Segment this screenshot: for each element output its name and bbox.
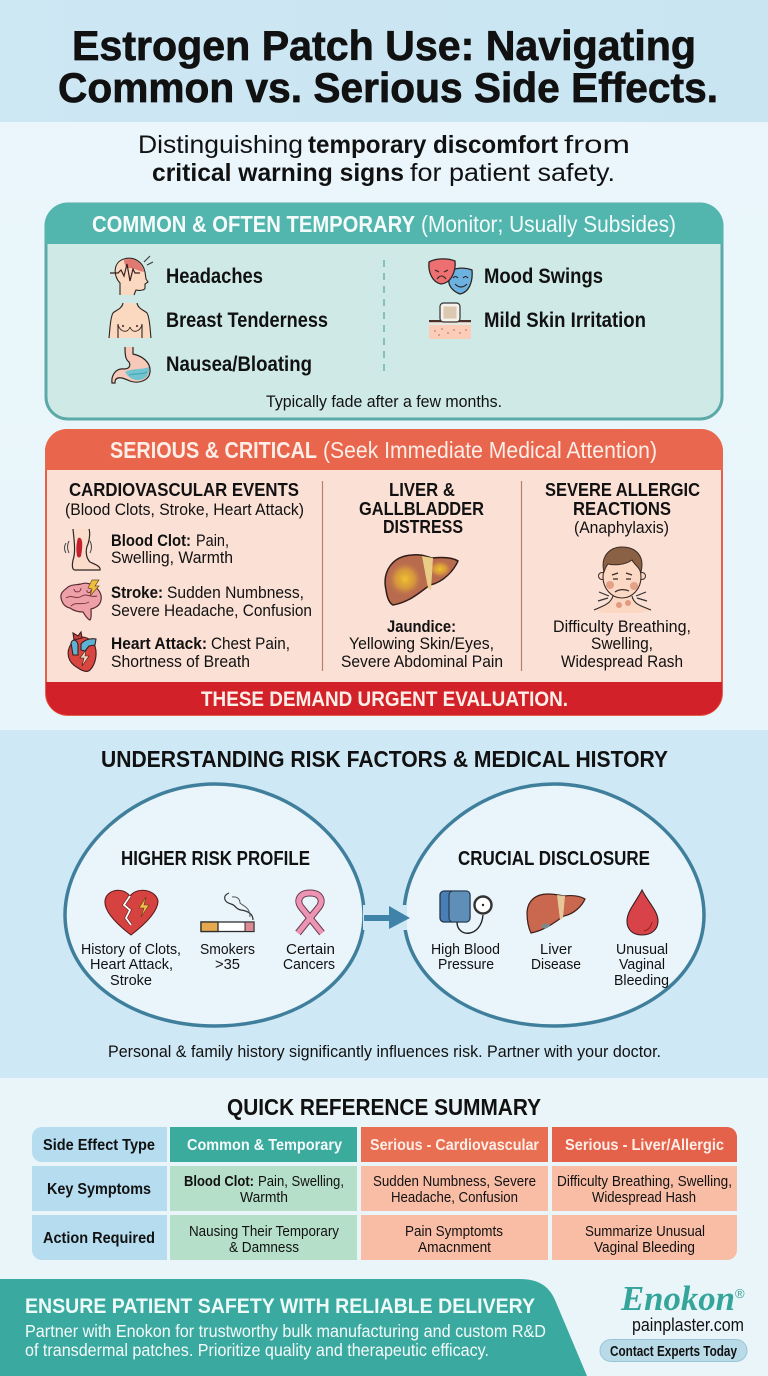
text: jaundice: Severe Abdominal Pain [341, 653, 503, 671]
subtitle: temporary discomfort [308, 131, 559, 159]
row: action required: Amacnment [418, 1239, 492, 1256]
brand: enokon [600, 1279, 747, 1362]
row: key symptoms: Difficulty Breathing, Swelling, [557, 1173, 732, 1190]
text: allergic symptoms: Swelling, [591, 635, 653, 653]
icon: breast [109, 303, 151, 338]
row: action required: Vaginal Bleeding [594, 1239, 695, 1256]
table: quick reference summary [32, 1127, 737, 1260]
text: certain cancers [283, 941, 335, 973]
panel heading: common: (Monitor; Usually Subsides) [421, 211, 676, 237]
text: history of clots [81, 941, 181, 989]
icon: blood pressure cuff [440, 891, 492, 933]
column: cardiovascular events [61, 480, 312, 671]
footer text: Partner with Enokon for trustworthy bulk manufacturing and custom R&D [25, 1321, 546, 1341]
row: action required: & Damness [229, 1239, 299, 1256]
text: liver disease: Disease [531, 956, 581, 973]
icon: broken heart [105, 890, 158, 935]
text: stroke: Stroke: [111, 584, 163, 602]
text: allergic symptoms [553, 618, 691, 671]
subtitle [138, 131, 630, 187]
panel: serious and critical [45, 429, 723, 715]
note: personal and family history: Personal & family history significantly influences risk. Partner with your doctor. [108, 1042, 661, 1061]
icon: mood masks [429, 259, 472, 294]
text: certain cancers: Certain [286, 941, 335, 958]
heading: allergic: SEVERE ALLERGIC [545, 480, 700, 500]
heading: liver: LIVER & [389, 480, 455, 500]
row: side effect type: Side Effect Type [43, 1137, 155, 1154]
row: key symptoms: Warmth [240, 1189, 288, 1206]
contact button: Contact Experts Today [610, 1344, 737, 1360]
text: smokers: Smokers [200, 941, 255, 958]
panel: common and often temporary [45, 203, 723, 419]
column: severe allergic reactions [545, 480, 700, 671]
heading: allergic [545, 480, 700, 537]
text: breast tenderness: Breast Tenderness [166, 309, 328, 332]
urgent banner [46, 682, 722, 715]
heading: higher risk: HIGHER RISK PROFILE [121, 848, 310, 870]
footer banner: ensure patient safety [0, 1279, 587, 1376]
panel heading: serious: SERIOUS & CRITICAL [110, 437, 317, 463]
icon: allergic face [594, 547, 651, 613]
title: Common vs. Serious Side Effects. [58, 64, 718, 111]
text: heart attack [111, 635, 290, 671]
text: blood clot [111, 532, 233, 567]
text: smokers: >35 [215, 956, 240, 973]
panel heading: serious [110, 437, 657, 463]
panel: crucial disclosure [404, 784, 704, 1026]
row: key symptoms: Pain, Swelling, [258, 1173, 344, 1190]
row: key symptoms: Headache, Confusion [391, 1189, 518, 1206]
heading: cardiovascular: (Blood Clots, Stroke, Heart Attack) [65, 501, 304, 519]
section heading: quick reference: QUICK REFERENCE SUMMARY [227, 1094, 541, 1120]
text: heart attack: Chest Pain, [211, 635, 290, 653]
logo wordmark: Enokon [620, 1279, 735, 1318]
footer text: of transdermal patches. Prioritize quality and therapeutic efficacy. [25, 1340, 489, 1360]
icon: headache head [110, 256, 153, 295]
text: stroke [111, 584, 312, 620]
text: high blood pressure: Pressure [438, 956, 494, 973]
text: jaundice: Yellowing Skin/Eyes, [349, 635, 494, 653]
text: blood clot: Swelling, Warmth [111, 549, 233, 567]
icon: heart [68, 632, 96, 671]
text: jaundice: Jaundice: [387, 618, 456, 636]
heading: allergic: (Anaphylaxis) [574, 519, 669, 537]
panel heading: serious: (Seek Immediate Medical Attention) [323, 437, 657, 463]
text: jaundice [341, 618, 503, 671]
text: unusual vaginal bleeding: Unusual [616, 941, 668, 958]
text: certain cancers: Cancers [283, 956, 335, 973]
icon: pink ribbon [298, 893, 322, 933]
text: stroke: Severe Headache, Confusion [111, 602, 312, 620]
row: action required: Nausing Their Temporary [189, 1223, 339, 1240]
text: history of clots: Heart Attack, [90, 956, 173, 973]
title [58, 22, 718, 111]
heading: cardiovascular [65, 480, 304, 519]
icon: brain with bolt [61, 580, 101, 620]
column: liver and gallbladder distress [341, 480, 503, 671]
icon: blood drop [627, 890, 658, 935]
arrow: risk to disclosure [363, 905, 410, 930]
row: key symptoms: Blood Clot: [184, 1173, 254, 1190]
text: unusual vaginal bleeding [614, 941, 669, 989]
heading: crucial: CRUCIAL DISCLOSURE [458, 848, 650, 870]
subtitle: from [564, 131, 630, 159]
icon: leg with clot [64, 529, 100, 570]
text: mild skin irritation: Mild Skin Irritation [484, 309, 646, 332]
row: action required: Action Required [43, 1230, 155, 1247]
row: side effect type [32, 1127, 737, 1162]
icon: stomach [112, 347, 150, 383]
panel: higher risk profile [65, 784, 364, 1026]
row: key symptoms: Widespread Hash [592, 1189, 696, 1206]
text: liver disease: Liver [540, 941, 572, 958]
heading: allergic: REACTIONS [573, 499, 671, 519]
icon: liver [527, 894, 585, 933]
row: action required [32, 1215, 737, 1260]
row: action required: Summarize Unusual [585, 1223, 705, 1240]
subtitle: critical warning signs [152, 159, 404, 187]
footer text [25, 1321, 546, 1360]
row: side effect type: Serious - Cardiovascular [370, 1137, 539, 1154]
text: unusual vaginal bleeding: Vaginal [619, 956, 665, 973]
website: painplaster.com [632, 1315, 744, 1335]
logo wordmark: ® [735, 1286, 745, 1301]
heading: liver [359, 480, 484, 537]
icon: jaundiced liver [385, 555, 458, 605]
text: allergic symptoms: Difficulty Breathing, [553, 618, 691, 636]
row: action required: Pain Symptomts [405, 1223, 503, 1240]
contact button [600, 1340, 747, 1362]
text: smokers [200, 941, 255, 973]
icon: skin patch [429, 303, 471, 339]
note: typically fade: Typically fade after a few months. [266, 392, 502, 411]
row: side effect type: Common & Temporary [187, 1137, 342, 1154]
heading: liver: DISTRESS [383, 517, 463, 537]
row: key symptoms [32, 1166, 737, 1211]
subtitle: for patient safety. [410, 159, 615, 187]
heading: cardiovascular: CARDIOVASCULAR EVENTS [69, 480, 299, 500]
panel heading: common [92, 211, 676, 237]
footer heading: ENSURE PATIENT SAFETY WITH RELIABLE DELIVERY [25, 1295, 535, 1318]
text: blood clot: Pain, [196, 532, 229, 550]
icon: cigarette [201, 893, 254, 932]
text: unusual vaginal bleeding: Bleeding [614, 972, 669, 989]
row: key symptoms: Key Symptoms [47, 1181, 151, 1198]
header band with title [0, 0, 768, 122]
text: history of clots: History of Clots, [81, 941, 181, 958]
text: heart attack: Shortness of Breath [111, 653, 250, 671]
text: allergic symptoms: Widespread Rash [561, 653, 683, 671]
section heading: risk factors: UNDERSTANDING RISK FACTORS & MEDICAL HISTORY [101, 746, 668, 772]
subtitle: Distinguishing [138, 131, 303, 159]
row: key symptoms: Sudden Numbness, Severe [373, 1173, 536, 1190]
text: blood clot: Blood Clot: [111, 532, 191, 550]
text: nausea bloating: Nausea/Bloating [166, 353, 312, 376]
text: high blood pressure [431, 941, 500, 973]
text: heart attack: Heart Attack: [111, 635, 207, 653]
text: history of clots: Stroke [110, 972, 152, 989]
text: high blood pressure: High Blood [431, 941, 500, 958]
panel heading: common: COMMON & OFTEN TEMPORARY [92, 211, 415, 237]
heading: liver: GALLBLADDER [359, 499, 484, 519]
text: liver disease [531, 941, 581, 973]
text: headaches: Headaches [166, 265, 263, 288]
urgent banner: THESE DEMAND URGENT EVALUATION. [201, 688, 568, 711]
text: mood swings: Mood Swings [484, 265, 603, 288]
text: stroke: Sudden Numbness, [167, 584, 304, 602]
title: Estrogen Patch Use: Navigating [72, 22, 696, 69]
row: side effect type: Serious - Liver/Allergic [565, 1137, 724, 1154]
